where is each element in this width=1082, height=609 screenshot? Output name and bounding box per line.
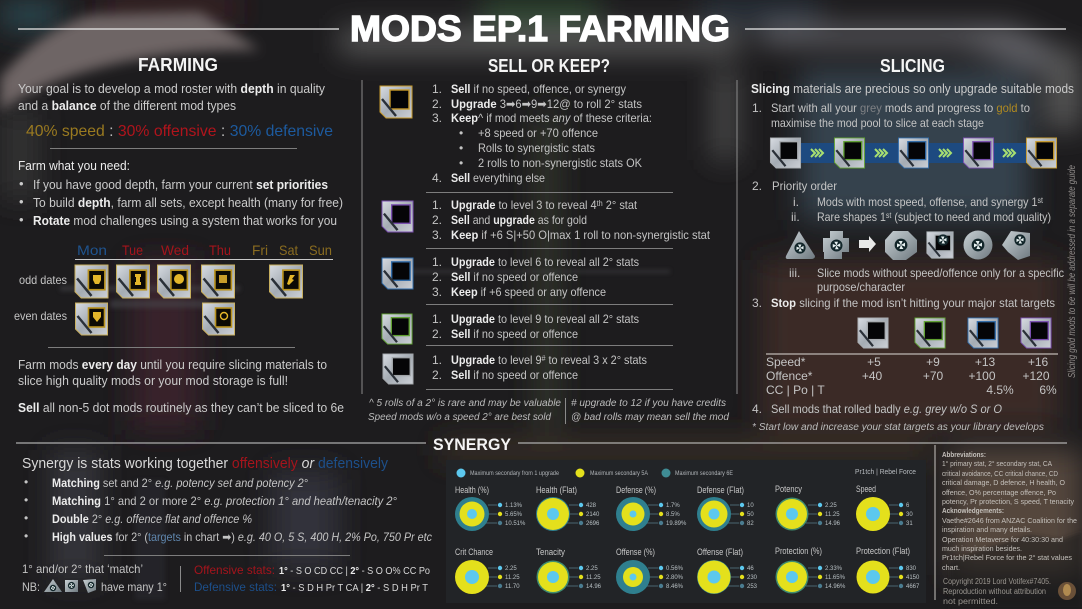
- table: stat targets: Offence*: [766, 369, 813, 383]
- list item 2 priority order: i.: [793, 195, 799, 209]
- chart: protection flat: 4150: [906, 575, 920, 581]
- table: stat targets: +40: [862, 369, 883, 383]
- list: synergy types: •: [24, 511, 28, 525]
- chart: health flat: 2140: [586, 512, 600, 518]
- stat key: Defensive stats:: [194, 580, 277, 594]
- chart: defense flat: [697, 485, 754, 531]
- text block: goal: Your goal is to develop a mod roster with depth in quality: [18, 81, 325, 96]
- list item 2 priority order: st: [886, 211, 892, 220]
- chart: health percent: 5.65%: [505, 512, 523, 518]
- panel: sell or keep: [362, 56, 737, 424]
- chart: defense percent: Defense (%): [616, 485, 656, 495]
- chart: speed: [856, 484, 913, 531]
- text block: abbreviations and acknowledgements: chart.: [942, 563, 960, 572]
- chart: speed: 31: [906, 521, 913, 527]
- list: gold mod: +8 speed or +70 offence: [478, 126, 598, 140]
- chart: offense flat: 253: [747, 584, 758, 590]
- list item 2 priority order: Priority order: [772, 179, 837, 193]
- note: match: NB:: [22, 580, 40, 594]
- list: gold mod: [432, 82, 652, 185]
- list: grey mod: 2.: [432, 368, 442, 382]
- note: match: [22, 562, 167, 594]
- footnotes: [368, 398, 729, 424]
- list: gold mod: Sell everything else: [451, 171, 545, 185]
- table: stat targets: Speed*: [766, 355, 806, 369]
- list: purple mod: Upgrade to level 3 to reveal 4: [451, 198, 606, 212]
- list item 1: Start with all your grey mods and progress to gold to: [771, 101, 1030, 115]
- list: blue mod: [432, 255, 639, 299]
- list item 2 priority order: ii.: [791, 210, 800, 224]
- icon: grey mod: [383, 354, 413, 384]
- list: gold mod: Rolls to synergistic stats: [478, 141, 595, 155]
- list item 2 priority order: [752, 179, 1051, 224]
- list: grey mod: #: [542, 354, 546, 363]
- list item 2 priority order: Rare shapes 1: [817, 210, 895, 224]
- list: green mod: 2.: [432, 327, 442, 341]
- text block: farm what you need: If you have good depth, farm your current set priorities: [33, 177, 328, 192]
- list: synergy types: •: [24, 529, 28, 543]
- list: purple mod: 2° stat: [603, 198, 638, 212]
- list item 3 stop: 3.: [752, 296, 762, 310]
- chart: potency: 11.25: [825, 512, 840, 518]
- chart: health percent: 10.51%: [505, 521, 526, 527]
- table: stat targets: +13: [975, 355, 996, 369]
- list: synergy types: Double 2° e.g. offence flat and offence %: [52, 512, 252, 526]
- schedule header: days: Sat: [279, 242, 298, 258]
- list: grey mod: to reveal 3 x 2° stats: [546, 353, 647, 367]
- chart: health flat: [536, 485, 600, 531]
- stat key: Offensive stats:: [194, 563, 275, 577]
- list item 1: [752, 101, 1030, 130]
- chart: speed: 6: [906, 503, 910, 509]
- schedule header: days: [75, 242, 333, 260]
- chart: health flat: 2696: [586, 521, 600, 527]
- chart: health flat: Health (Flat): [536, 485, 577, 495]
- text block: abbreviations and acknowledgements: critical damage, D defence, H health, O: [942, 478, 1065, 487]
- label: odd dates: odd dates: [19, 273, 67, 287]
- table: stat targets: +120: [1022, 369, 1050, 383]
- table: stat targets: [766, 318, 1058, 397]
- list item 2 priority order: Mods with most speed, offense, and synergy 1: [817, 195, 1064, 209]
- text block: copyright: [943, 577, 1051, 606]
- chart: protection percent: 2.33%: [825, 566, 843, 572]
- chart: offense flat: 46: [747, 566, 754, 572]
- icon: gold mod: [380, 86, 412, 118]
- heading: slicing: SLICING: [880, 56, 945, 76]
- list: grey mod: 1.: [432, 353, 442, 367]
- chart: protection flat: 4667: [906, 584, 920, 590]
- chart: health percent: 1.13%: [505, 503, 523, 509]
- title: MODS EP.1 FARMING: [350, 8, 730, 49]
- panel: synergy: [16, 435, 1067, 594]
- icon: green mod: [382, 314, 412, 344]
- chart: defense percent: [616, 485, 687, 531]
- list item 2 priority order: (subject to need and mod quality): [891, 210, 1051, 224]
- list: blue mod: 3.: [432, 285, 442, 299]
- chart: health flat: 428: [586, 503, 597, 509]
- chart: defense percent: 1.7%: [666, 503, 680, 509]
- chart: crit chance: 11.70: [505, 584, 520, 590]
- chart: defense flat: 82: [747, 521, 754, 527]
- list: purple mod: 1.: [432, 198, 442, 212]
- chart: speed: 30: [906, 512, 913, 518]
- slicing progression chain: [770, 138, 1057, 168]
- stat key: 1° - S O CD CC | 2° - S O O% CC Po: [279, 565, 430, 577]
- text block: abbreviations and acknowledgements: inspiration and many details.: [942, 525, 1032, 534]
- label: even dates: even dates: [14, 309, 67, 323]
- table: stat targets: CC | Po | T: [766, 383, 825, 397]
- list: gold mod: •: [459, 156, 463, 170]
- text block: copyright: Reproduction without attribution: [943, 587, 1046, 596]
- chart: tenacity: [536, 547, 602, 594]
- list: purple mod: [432, 198, 711, 242]
- stat key: 1° - S D H Pr T CA | 2° - S D H Pr T: [281, 582, 429, 594]
- text block: abbreviations and acknowledgements: Pr1tch|Rebel Force for the 2° stat values: [942, 553, 1072, 562]
- chart: protection flat: Protection (Flat): [856, 546, 910, 556]
- list item 2 priority order: st: [1037, 196, 1044, 205]
- list: synergy types: •: [24, 475, 28, 489]
- chart: offense flat: 230: [747, 575, 758, 581]
- list: synergy types: •: [24, 493, 28, 507]
- text block: copyright: not permitted.: [943, 597, 998, 606]
- list: blue mod: 2.: [432, 270, 442, 284]
- chart: crit chance: 11.25: [505, 575, 520, 581]
- chart: crit chance: 2.25: [505, 566, 517, 572]
- panel: slicing: [751, 56, 1078, 433]
- ratio: speed offensive defensive: 40% speed : 30% offensive : 30% defensive: [26, 123, 333, 140]
- table: stat targets: 4.5%: [986, 383, 1014, 397]
- text block: farm what you need: •: [19, 194, 24, 209]
- chart: offense flat: [697, 547, 758, 594]
- list item 3 stop: Stop slicing if the mod isn’t hitting your major stat targets: [771, 296, 1055, 310]
- list: gold mod: 4.: [432, 171, 442, 185]
- list item 2 priority order: 2.: [752, 179, 762, 193]
- list: blue mod: Keep if +6 speed or any offence: [451, 285, 606, 299]
- text block: abbreviations and acknowledgements: potency, Pr protection, S speed, T tenacity: [942, 497, 1074, 506]
- list: gold mod: 3.: [432, 111, 442, 125]
- text block: farm what you need: Rotate mod challenges using a system that works for you: [33, 213, 337, 228]
- text block: farm every day: [18, 357, 344, 415]
- icon: purple mod: [382, 201, 413, 232]
- chart: protection percent: [775, 546, 846, 594]
- list: gold mod: Sell if no speed, offence, or synergy: [451, 82, 626, 96]
- text block: farm every day: Farm mods every day until you require slicing materials to: [18, 357, 327, 372]
- panel: farming: [14, 55, 344, 415]
- list: purple mod: Keep if +6 S|+50 O|max 1 roll to non-synergistic stat: [451, 228, 711, 242]
- text block: goal: [18, 81, 325, 113]
- legend: Maximum secondary from 1 upgrade: [470, 470, 559, 477]
- chart: health percent: [455, 485, 526, 531]
- text block: abbreviations and acknowledgements: 1° primary stat, 2° secondary stat, CA: [942, 459, 1052, 468]
- table: stat targets: +70: [923, 369, 944, 383]
- schedule header: days: Wed: [161, 242, 189, 258]
- text block: abbreviations and acknowledgements: offence, O% percentage offence, Po: [942, 488, 1056, 497]
- text block: abbreviations and acknowledgements: much inspiration besides.: [942, 544, 1022, 553]
- table: stat targets: +100: [968, 369, 996, 383]
- list: synergy types: Matching set and 2° e.g. potency set and potency 2°: [52, 476, 308, 490]
- list: synergy types: [24, 475, 432, 544]
- text block: farm what you need: •: [19, 212, 24, 227]
- note: match: 1° and/or 2° that ‘match’: [22, 562, 143, 576]
- list: blue mod: Upgrade to level 6 to reveal all 2° stats: [451, 255, 639, 269]
- chart: defense flat: Defense (Flat): [697, 485, 744, 495]
- list: purple mod: th: [597, 199, 603, 208]
- chart: secondary stat values: [446, 460, 926, 603]
- text block: abbreviations and acknowledgements: Operation Metaverse for 40:30:30 and: [942, 535, 1063, 544]
- list item 1: 1.: [752, 101, 762, 115]
- chart: crit chance: [455, 547, 520, 594]
- chart: protection percent: Protection (%): [775, 546, 822, 556]
- list: gold mod: Keep^ if mod meets any of these criteria:: [451, 111, 652, 125]
- mods: schedule icons: [75, 265, 302, 335]
- chart: potency: Potency: [775, 484, 802, 494]
- list: green mod: [432, 312, 639, 341]
- list: green mod: Sell if no speed or offence: [451, 327, 578, 341]
- list: synergy types: High values for 2° (targets in chart ➡) e.g. 40 O, 5 S, 400 H, 2% Po, 750 Pr etc: [52, 530, 432, 544]
- list: grey mod: Upgrade to level 9: [451, 353, 546, 367]
- text block: abbreviations and acknowledgements: [942, 450, 1077, 572]
- chart: crit chance: Crit Chance: [455, 547, 493, 557]
- list: gold mod: •: [459, 141, 463, 155]
- chart: protection percent: 14.96%: [825, 584, 846, 590]
- list: grey mod: Sell if no speed or offence: [451, 368, 578, 382]
- schedule header: days: Mon: [77, 242, 107, 258]
- chart: tenacity: 14.96: [586, 584, 602, 590]
- text block: abbreviations and acknowledgements: Acknowledgements:: [942, 506, 1004, 515]
- chart: offense percent: [616, 547, 684, 594]
- text block: goal: and a balance of the different mod types: [18, 98, 236, 113]
- chart: tenacity: Tenacity: [536, 547, 565, 557]
- schedule header: days: Sun: [309, 242, 332, 258]
- icon: author avatar: [1058, 582, 1076, 600]
- footnotes: # upgrade to 12 if you have credits: [571, 398, 726, 409]
- text block: abbreviations and acknowledgements: critical avoidance, CC critical chance, CD: [942, 469, 1058, 478]
- legend: Maximum secondary 6E: [675, 470, 733, 477]
- list: green mod: Upgrade to level 9 to reveal all 2° stats: [451, 312, 639, 326]
- text block: farm what you need: •: [19, 176, 24, 191]
- list: purple mod: Sell and upgrade as for gold: [451, 213, 587, 227]
- table: stat targets: +5: [867, 355, 881, 369]
- heading: farming: FARMING: [138, 55, 218, 75]
- schedule header: days: Tue: [122, 242, 143, 258]
- list item 4 sell: Sell mods that rolled badly e.g. grey w/o S or O: [771, 402, 1002, 416]
- text block: abbreviations and acknowledgements: Abbreviations:: [942, 450, 986, 459]
- chart: protection flat: 830: [906, 566, 917, 572]
- chart: offense percent: 2.80%: [666, 575, 684, 581]
- chart: defense percent: 19.89%: [666, 521, 687, 527]
- list: purple mod: 2.: [432, 213, 442, 227]
- chart: offense percent: 0.56%: [666, 566, 684, 572]
- chart: defense percent: 8.5%: [666, 512, 680, 518]
- table: stat targets: +16: [1028, 355, 1049, 369]
- stat key: [194, 563, 430, 594]
- schedule header: days: Thu: [209, 242, 231, 258]
- chart: health percent: Health (%): [455, 485, 489, 495]
- text block: abbreviations and acknowledgements: Vaethe#2646 from ANZAC Coalition for the: [942, 516, 1077, 525]
- list: grey mod: [432, 353, 647, 382]
- text block: farm what you need: Farm what you need:: [18, 158, 130, 173]
- side note: gold mods: Slicing gold mods to 6e will be addressed in a separate guide: [1067, 165, 1078, 378]
- list: green mod: 1.: [432, 312, 442, 326]
- footnote: start low: * Start low and increase your stat targets as your library develops: [752, 422, 1044, 433]
- list item 1: maximise the mod pool to slice at each stage: [771, 116, 984, 130]
- list: purple mod: 3.: [432, 228, 442, 242]
- text block: farm every day: slice high quality mods or your mod storage is full!: [18, 373, 288, 388]
- text block: farm what you need: [18, 158, 343, 228]
- footnotes: ^ 5 rolls of a 2° is rare and may be valuable: [369, 398, 561, 409]
- list: gold mod: •: [459, 126, 463, 140]
- table: stat targets: +9: [926, 355, 940, 369]
- list: blue mod: Sell if no speed or offence: [451, 270, 578, 284]
- schedule header: days: Fri: [252, 242, 268, 258]
- icon: blue mod: [382, 258, 413, 289]
- chart: defense flat: 10: [747, 503, 754, 509]
- chart: tenacity: 11.25: [586, 575, 601, 581]
- list item iii: iii.: [789, 266, 800, 280]
- chart: potency: [775, 484, 841, 530]
- chart: defense flat: 50: [747, 512, 754, 518]
- chart: offense percent: 8.46%: [666, 584, 684, 590]
- list: gold mod: 2 rolls to non-synergistic stats OK: [478, 156, 642, 170]
- table: stat targets: 6%: [1039, 383, 1057, 397]
- list: synergy types: Matching 1° and 2 or more 2° e.g. protection 1° and heath/tenacity 2°: [52, 494, 397, 508]
- chart: protection percent: 11.65%: [825, 575, 846, 581]
- footnotes: Speed mods w/o a speed 2° are best sold: [368, 412, 551, 423]
- heading: synergy: SYNERGY: [433, 435, 512, 454]
- legend: Pr1tch | Rebel Force: [855, 467, 916, 476]
- chart: speed: Speed: [856, 484, 876, 494]
- icons: mod shapes: [786, 230, 1030, 260]
- chart: potency: 2.25: [825, 503, 837, 509]
- list: gold mod: 1.: [432, 82, 442, 96]
- chart: offense percent: Offense (%): [616, 547, 655, 557]
- chart: offense flat: Offense (Flat): [697, 547, 743, 557]
- note: match: have many 1°: [101, 580, 167, 594]
- chart: tenacity: 2.25: [586, 566, 598, 572]
- chart: potency: 14.96: [825, 521, 841, 527]
- text block: synergy definition: Synergy is stats working together offensively or defensively: [22, 455, 388, 472]
- list: gold mod: 2.: [432, 97, 442, 111]
- footnotes: @ bad rolls may mean sell the mod: [571, 412, 729, 423]
- list item 4 sell: 4.: [752, 402, 762, 416]
- heading: sell or keep: SELL OR KEEP?: [488, 56, 610, 76]
- text block: farm what you need: To build depth, farm all sets, except health (many for free): [33, 195, 343, 210]
- list item iii: purpose/character: [817, 280, 905, 294]
- list: gold mod: Upgrade 3➡6➡9➡12@ to roll 2° stats: [451, 97, 642, 111]
- legend: [456, 467, 916, 478]
- text block: farm every day: Sell all non-5 dot mods routinely as they can’t be sliced to 6e: [18, 400, 344, 415]
- text block: copyright: Copyright 2019 Lord Votifex#7405.: [943, 577, 1051, 586]
- legend: Maximum secondary 5A: [590, 470, 649, 477]
- list item iii: [789, 266, 1064, 294]
- list: blue mod: 1.: [432, 255, 442, 269]
- chart: protection flat: [856, 546, 920, 594]
